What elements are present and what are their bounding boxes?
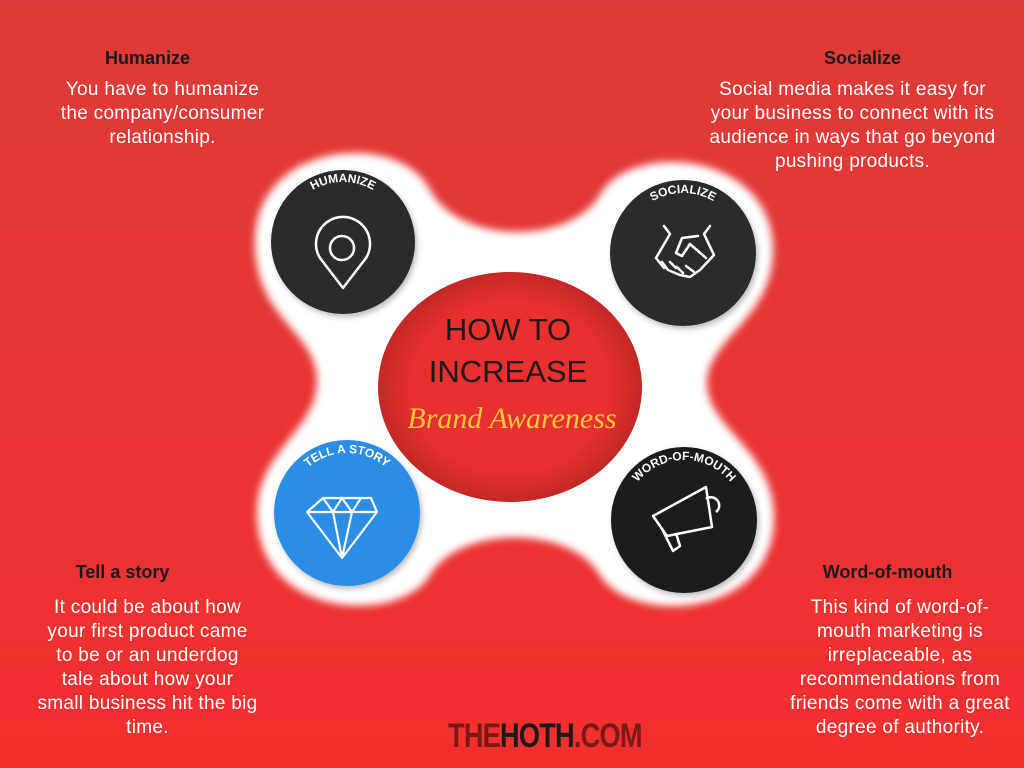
- text: socialize: [709, 79, 996, 172]
- text: socialize: pushing products.: [775, 151, 930, 172]
- heading: humanize: Humanize: [105, 48, 190, 68]
- circle: humanize: [270, 170, 420, 320]
- circle: word-of-mouth: [610, 447, 762, 599]
- text: tell a story: It could be about how: [54, 597, 241, 618]
- circle: tell a story: [273, 440, 425, 592]
- text: word-of-mouth: friends come with a great: [790, 693, 1010, 714]
- text: tell a story: tale about how your: [62, 669, 233, 690]
- text: word-of-mouth: irreplaceable, as: [828, 645, 972, 666]
- circle: socialize: SOCIALIZE: [650, 184, 717, 201]
- text: humanize: You have to humanize: [66, 79, 259, 100]
- text: tell a story: [37, 597, 258, 738]
- center title ellipse: Brand Awareness: [407, 402, 617, 435]
- text: socialize: audience in ways that go beyond: [709, 127, 996, 148]
- center title ellipse: INCREASE: [429, 354, 587, 389]
- circle: humanize: HUMANIZE: [310, 174, 376, 190]
- text: humanize: relationship.: [109, 127, 216, 148]
- text: word-of-mouth: [790, 597, 1010, 738]
- center title ellipse: [378, 272, 642, 502]
- text: tell a story: your first product came: [47, 621, 248, 642]
- heading: tell a story: Tell a story: [76, 562, 169, 582]
- center title ellipse: HOW TO: [445, 312, 571, 347]
- heading: word-of-mouth: Word-of-mouth: [823, 562, 952, 582]
- logo: THEHOTH.COM: [448, 717, 642, 755]
- text: word-of-mouth: recommendations from: [800, 669, 1000, 690]
- text: word-of-mouth: This kind of word-of-: [811, 597, 989, 618]
- text: socialize: your business to connect with its: [711, 103, 994, 124]
- heading: socialize: Socialize: [824, 48, 901, 68]
- text: socialize: Social media makes it easy for: [719, 79, 986, 100]
- circle: word-of-mouth: WORD-OF-MOUTH: [631, 452, 736, 482]
- text: humanize: [61, 79, 264, 148]
- circle: tell a story: TELL A STORY: [303, 444, 391, 466]
- text: humanize: the company/consumer: [61, 103, 264, 124]
- circle: socialize: [609, 180, 761, 332]
- text: tell a story: small business hit the big: [37, 693, 258, 714]
- text: word-of-mouth: degree of authority.: [816, 717, 984, 738]
- text: tell a story: time.: [126, 717, 169, 738]
- text: tell a story: to be or an underdog: [56, 645, 239, 666]
- text: word-of-mouth: mouth marketing is: [817, 621, 983, 642]
